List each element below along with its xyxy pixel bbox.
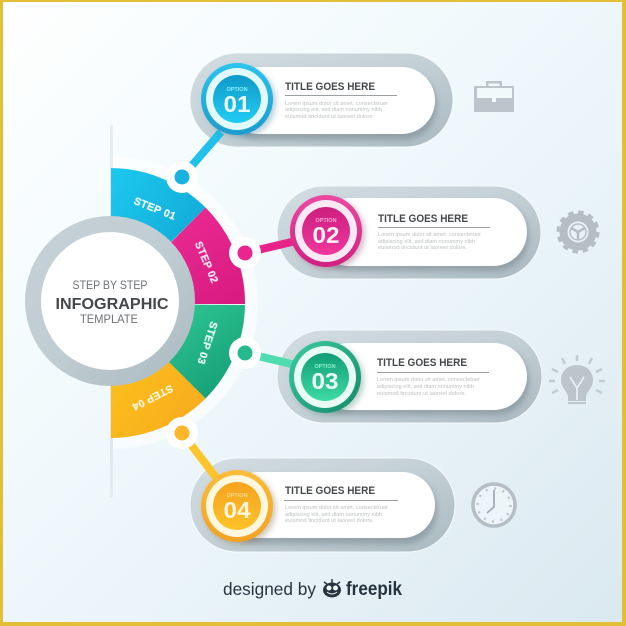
- centre text: STEP BY STEP: [72, 280, 148, 292]
- body text: [285, 101, 388, 120]
- grey ring: [25, 216, 195, 386]
- body text: [377, 377, 480, 397]
- body text: Lorem ipsum dolor sit amet, consectetuer: [285, 505, 388, 511]
- step 04 label: STEP 04: [130, 382, 175, 413]
- white pill: [315, 198, 527, 266]
- connector: [245, 241, 296, 253]
- body text: euismod tincidunt ut laoreet dolore.: [285, 518, 374, 524]
- option 03: OPTION: [314, 364, 336, 370]
- segment: step 03: [110, 304, 245, 398]
- icon: briefcase: [474, 81, 514, 112]
- title: TITLE GOES HERE: [378, 213, 468, 225]
- pill shadow: [225, 71, 437, 140]
- option 04: [166, 417, 455, 552]
- pill shadow: [315, 202, 529, 271]
- body text: Lorem ipsum dolor sit amet, consectetuer: [378, 232, 481, 238]
- option 03: 03: [312, 368, 338, 394]
- semicircle wheel: [110, 125, 258, 497]
- pill track: [190, 458, 455, 552]
- icon: freepik mascot: [323, 579, 341, 598]
- white halo: [112, 157, 258, 449]
- credit: designed by freepik: freepik: [346, 579, 402, 600]
- pill track: [190, 53, 453, 147]
- credit: designed by freepik: designed by: [223, 579, 316, 599]
- option 02: OPTION: [315, 218, 337, 224]
- connector: [182, 132, 221, 177]
- white pill: [225, 67, 435, 134]
- pill shadow: [225, 476, 437, 544]
- white pill: [225, 472, 435, 538]
- body text: euismod tincidunt ut laoreet dolore.: [285, 114, 374, 120]
- segment: step 04: [111, 304, 206, 438]
- centre text: [56, 280, 169, 326]
- credit: designed by freepik: [223, 579, 402, 600]
- step 03 label: STEP 03: [194, 320, 220, 366]
- body text: euismod tincidunt ut laoreet dolore.: [377, 391, 466, 397]
- node: [166, 417, 198, 449]
- step 01 label: STEP 01: [132, 195, 177, 223]
- option 04: 04: [224, 497, 251, 523]
- segment: step 01: [110, 168, 206, 303]
- body text: euismod tincidunt ut laoreet dolore.: [378, 245, 467, 251]
- title: TITLE GOES HERE: [285, 485, 375, 497]
- badge: [293, 198, 365, 270]
- body text: Lorem ipsum dolor sit amet, consectetuer: [285, 101, 388, 107]
- white pill: [315, 343, 527, 410]
- pill track: [277, 330, 542, 423]
- body text: adipiscing elit, sed diam nonummy nibh: [377, 384, 474, 390]
- body text: [378, 232, 481, 251]
- option 01: OPTION: [226, 87, 248, 93]
- icon: gear: [558, 212, 598, 252]
- centre circle: [25, 216, 195, 386]
- node: [229, 237, 261, 269]
- white disc: [41, 232, 179, 370]
- centre text: INFOGRAPHIC: [56, 296, 169, 313]
- body text: [285, 505, 388, 524]
- option 01: [166, 53, 453, 193]
- connector: [245, 353, 296, 365]
- node: [229, 337, 261, 369]
- title: TITLE GOES HERE: [377, 357, 467, 369]
- body text: Lorem ipsum dolor sit amet, consectetuer: [377, 377, 480, 383]
- body text: adipiscing elit, sed diam nonummy nibh: [378, 239, 475, 245]
- segment: step 02: [110, 208, 245, 304]
- option 04: OPTION: [226, 493, 248, 499]
- option 01: 01: [224, 91, 251, 117]
- title: TITLE GOES HERE: [285, 81, 375, 93]
- icon: light bulb: [549, 355, 605, 404]
- badge: [292, 344, 364, 416]
- option 02: 02: [312, 222, 340, 248]
- badge: [204, 473, 276, 545]
- icon: clock: [473, 484, 515, 526]
- body text: adipiscing elit, sed diam nonummy nibh: [285, 107, 382, 113]
- option 03: [229, 330, 542, 423]
- pill track: [277, 186, 541, 279]
- connector: [182, 433, 218, 480]
- body text: adipiscing elit, sed diam nonummy nibh: [285, 512, 382, 518]
- option 02: [229, 186, 541, 279]
- badge: [204, 66, 276, 138]
- vertical axis line: [110, 125, 113, 497]
- node: [166, 161, 198, 193]
- pill shadow: [315, 347, 529, 415]
- step 02 label: STEP 02: [192, 240, 220, 285]
- centre text: TEMPLATE: [80, 314, 138, 326]
